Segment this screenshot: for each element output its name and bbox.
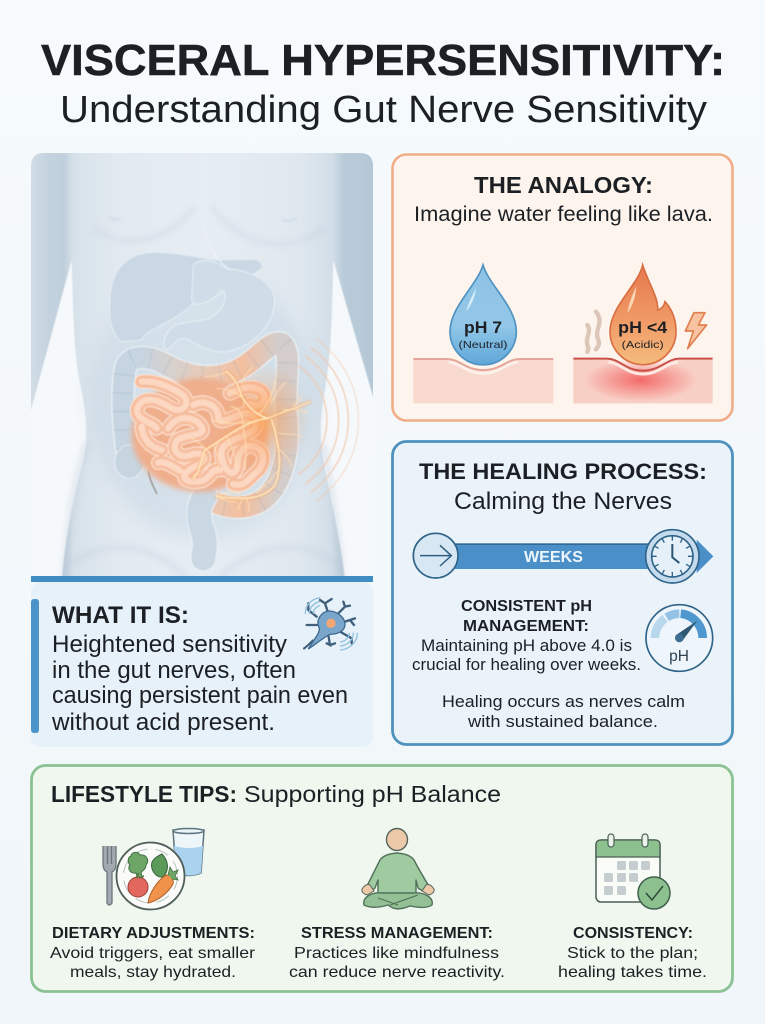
icon: meditating person bbox=[362, 828, 434, 909]
dietary text bbox=[50, 925, 256, 981]
icon: steam bbox=[587, 312, 600, 352]
label: pH 7: pH 7 bbox=[464, 319, 502, 337]
torso and arms silhouette bbox=[30, 150, 375, 580]
label: pH below 4: pH <4 bbox=[618, 319, 668, 337]
title: VISCERAL HYPERSENSITIVITY: bbox=[41, 36, 725, 85]
icon: fork, plate and water bbox=[103, 828, 204, 910]
consistent pH management text: MANAGEMENT: bbox=[463, 618, 589, 635]
what it is description bbox=[51, 631, 348, 736]
large intestine bbox=[115, 343, 288, 558]
consistency text bbox=[558, 925, 707, 981]
what it is description: without acid present. bbox=[51, 709, 275, 736]
what it is description: Heightened sensitivity bbox=[52, 631, 287, 658]
consistent pH management text: crucial for healing over weeks. bbox=[412, 656, 641, 674]
icon: calendar with check bbox=[596, 834, 670, 909]
healing closing note: Healing occurs as nerves calm bbox=[442, 693, 685, 711]
analogy subheading: Imagine water feeling like lava. bbox=[414, 203, 713, 226]
nerve branches bbox=[190, 367, 310, 512]
consistent pH management text: Maintaining pH above 4.0 is bbox=[421, 637, 632, 655]
what it is description: causing persistent pain even bbox=[52, 682, 348, 709]
icon: pH gauge bbox=[646, 605, 713, 671]
healing subheading: Calming the Nerves bbox=[454, 488, 672, 515]
what it is heading: WHAT IT IS: bbox=[52, 602, 189, 629]
liver bbox=[110, 252, 262, 342]
dietary text: meals, stay hydrated. bbox=[70, 964, 236, 981]
stress text: can reduce nerve reactivity. bbox=[289, 964, 505, 981]
dietary text: DIETARY ADJUSTMENTS: bbox=[52, 925, 255, 942]
panel: the healing process bbox=[392, 442, 732, 744]
dietary text: Avoid triggers, eat smaller bbox=[50, 945, 256, 962]
icon: pH gauge: pH bbox=[669, 648, 689, 665]
consistency text: CONSISTENCY: bbox=[573, 925, 693, 942]
title bbox=[41, 36, 725, 131]
timeline arrow bbox=[413, 530, 713, 583]
consistent pH management text bbox=[412, 598, 641, 674]
tissue: irritated bbox=[573, 358, 713, 403]
icon: lightning bolt bbox=[685, 313, 707, 349]
stress text: STRESS MANAGEMENT: bbox=[301, 925, 493, 942]
small intestine bbox=[132, 378, 268, 492]
stomach bbox=[164, 260, 275, 352]
tissue: neutral bbox=[413, 359, 553, 403]
icon: water drop bbox=[450, 265, 516, 365]
label: pH below 4 bbox=[618, 319, 668, 351]
consistent pH management text: CONSISTENT pH bbox=[461, 598, 592, 615]
icon: acid flame drop bbox=[610, 265, 676, 365]
healing closing note: with sustained balance. bbox=[467, 713, 658, 731]
consistency text: healing takes time. bbox=[558, 964, 707, 981]
panel: lifestyle tips bbox=[32, 766, 732, 992]
panel: what it is bbox=[31, 576, 373, 747]
label: pH 7: (Neutral) bbox=[458, 339, 508, 351]
title: Understanding Gut Nerve Sensitivity bbox=[60, 89, 707, 131]
consistency text: Stick to the plan; bbox=[567, 945, 698, 962]
icon: nerve cell bbox=[303, 598, 357, 650]
stress text bbox=[289, 925, 505, 981]
label: pH below 4: (Acidic) bbox=[622, 339, 664, 351]
healing closing note bbox=[442, 693, 685, 731]
lifestyle heading: Supporting pH Balance bbox=[244, 781, 501, 807]
label: pH 7 bbox=[458, 319, 508, 351]
pain waves bbox=[298, 339, 358, 501]
pain glow bbox=[223, 368, 306, 471]
stress text: Practices like mindfulness bbox=[294, 945, 499, 962]
timeline arrow: WEEKS bbox=[524, 549, 583, 566]
panel: anatomy illustration bbox=[30, 150, 375, 580]
what it is description: in the gut nerves, often bbox=[52, 657, 296, 684]
analogy heading: THE ANALOGY: bbox=[474, 172, 653, 198]
lifestyle heading: LIFESTYLE TIPS: bbox=[51, 781, 237, 807]
panel: the analogy bbox=[392, 154, 732, 420]
lifestyle heading bbox=[51, 781, 501, 807]
healing heading: THE HEALING PROCESS: bbox=[419, 459, 707, 484]
